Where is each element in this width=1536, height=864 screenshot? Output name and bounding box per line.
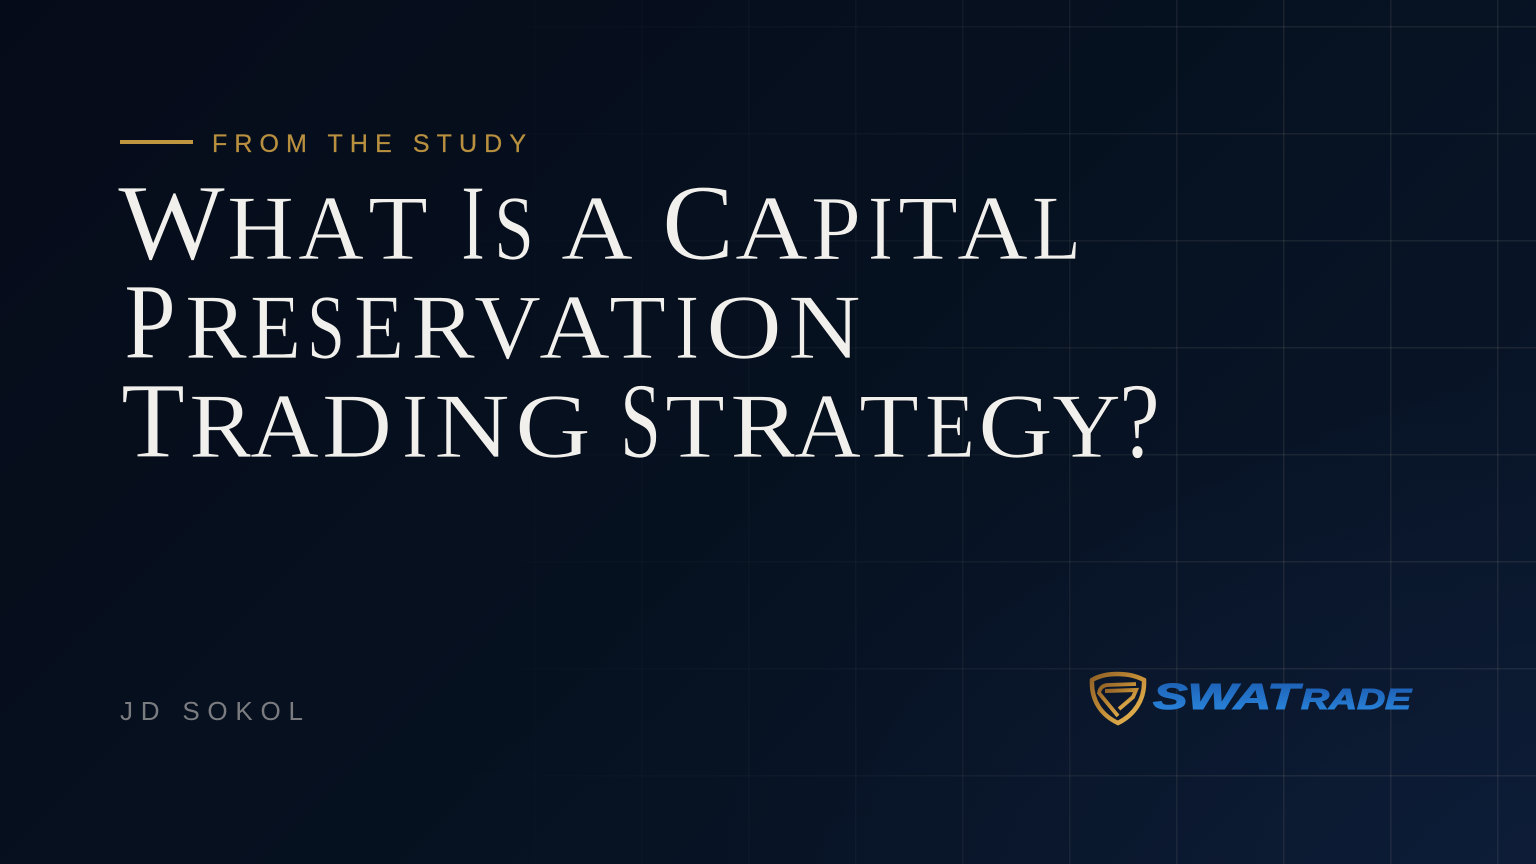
eyebrow rule xyxy=(120,140,193,144)
title: ? xyxy=(1119,362,1160,481)
title: W xyxy=(118,164,225,283)
title: P xyxy=(124,263,176,382)
title: E xyxy=(250,276,301,378)
title: A xyxy=(735,177,808,279)
title: A xyxy=(539,276,610,378)
title: I xyxy=(461,164,485,283)
title: T xyxy=(609,276,666,378)
wordmark xyxy=(1153,676,1413,717)
author: JD SOKOL xyxy=(120,696,303,726)
title: G xyxy=(978,375,1053,477)
title: Y xyxy=(1052,375,1121,477)
title: H xyxy=(227,177,294,279)
title: S xyxy=(307,276,345,378)
title: E xyxy=(354,276,404,378)
title: S xyxy=(620,362,661,481)
title: I xyxy=(868,177,893,279)
title: A xyxy=(298,177,364,279)
title: I xyxy=(675,276,699,378)
title: O xyxy=(706,276,782,378)
title: P xyxy=(811,177,861,279)
title: L xyxy=(1032,177,1081,279)
title: T xyxy=(898,177,958,279)
wordmark: SWAT xyxy=(1153,676,1303,717)
title: I xyxy=(402,375,428,477)
title: T xyxy=(121,362,185,481)
title: R xyxy=(730,375,800,477)
title: R xyxy=(189,375,255,477)
title: E xyxy=(925,375,975,477)
icon: gold shield xyxy=(1092,674,1144,723)
title: R xyxy=(411,276,476,378)
title: N xyxy=(788,276,861,378)
title: S xyxy=(494,177,534,279)
title: T xyxy=(368,177,428,279)
title xyxy=(118,164,1160,481)
title: A xyxy=(561,177,633,279)
title: D xyxy=(322,375,392,477)
eyebrow text: FROM THE STUDY xyxy=(212,130,526,158)
title: N xyxy=(434,375,510,477)
eyebrow: from the study xyxy=(120,130,526,158)
title: A xyxy=(957,177,1028,279)
title: T xyxy=(859,375,919,477)
title: A xyxy=(250,375,319,477)
title: R xyxy=(185,276,248,378)
title: G xyxy=(515,375,591,477)
title: V xyxy=(474,276,541,378)
title: A xyxy=(794,375,861,477)
wordmark: RADE xyxy=(1301,684,1413,716)
title: C xyxy=(662,164,734,283)
title: T xyxy=(665,375,725,477)
logo: swatrade xyxy=(1092,674,1413,723)
